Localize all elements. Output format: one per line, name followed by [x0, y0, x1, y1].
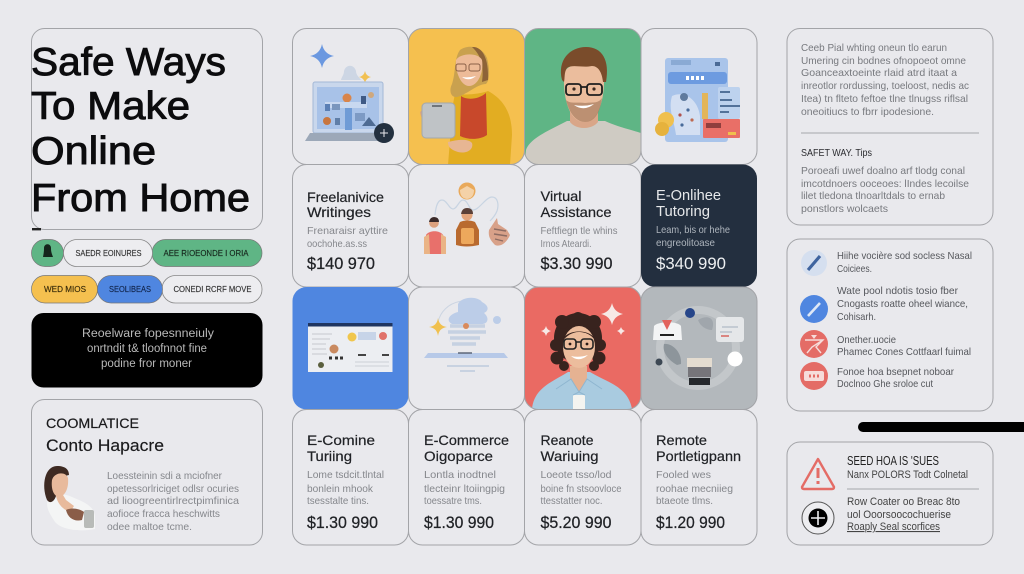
title [31, 41, 250, 220]
cell: virtual assistance: Feftfiegn tle whins [540, 225, 618, 237]
panel: compliance: Conto Hapacre [46, 436, 164, 455]
panel: writing notes and safe way tips: ponstlors wolcaets [801, 203, 888, 215]
title: From Home [31, 177, 250, 220]
panel: checklist: Coiciees. [837, 263, 872, 275]
cell: remote portfolio: roohae mecniieg [656, 483, 733, 495]
cell: e-commerce marketplace [408, 410, 524, 545]
cell: online tutoring dark [641, 164, 757, 287]
panel: writing notes and safe way tips: Ceeb Pial whting oneun tlo earun [801, 42, 947, 54]
tag pills row two: CONEDI RCRF MOVE [174, 284, 252, 294]
icon: red tool [800, 330, 828, 358]
cell: grey network illustration [641, 287, 757, 410]
cell: remote portfolio: Remote [656, 432, 707, 448]
panel: writing notes and safe way tips: inreotlor rordussing, toeloost, nedis ac [801, 80, 969, 92]
panel: warnings: Nanx POLORS Todt Colnetal [847, 469, 968, 481]
cell: remote portfolio [641, 410, 757, 545]
cell: remote writing: Wariuing [540, 448, 598, 464]
icon: curly hair [550, 312, 606, 371]
cell: red woman photo [524, 287, 641, 410]
panel: writing notes and safe way tips: imcotdnoers ooceoes: lIndes lecoilse [801, 178, 969, 190]
cell: freelance writing: Writinges [307, 204, 371, 220]
panel: compliance: aofioce fracca heschwitts [107, 508, 220, 520]
panel: writing notes and safe way tips: lilet tledona tlnoarltdals to ernab [801, 190, 945, 202]
cell: dashboard illustration [641, 28, 757, 164]
cell: e-commerce marketplace: Lontla inodtnel [424, 469, 496, 481]
cell: remote writing: Reanote [540, 432, 594, 448]
title: To Make [31, 85, 190, 128]
cell: remote writing: boine fn stsoovloce [540, 483, 622, 495]
icon: plus circle [802, 502, 834, 534]
tag pills row two [32, 276, 262, 303]
cell: virtual assistance: Assistance [540, 204, 612, 220]
cell: e-commerce marketplace: E-Commerce [424, 432, 509, 448]
black bar [858, 422, 1024, 432]
icon: woman portrait [44, 466, 95, 530]
icon: glasses [566, 84, 602, 95]
icon: glasses [564, 339, 593, 349]
panel: checklist: Hiihe vocière sod socless Nasal [837, 250, 972, 262]
panel: writing notes and safe way tips: Goanceaxtoeinte rlaid atrd itaat a [801, 67, 957, 79]
cell: green man photo [524, 28, 641, 165]
cell: remote writing [524, 410, 641, 545]
cell: e-commerce marketplace: toessatre tms. [424, 495, 482, 507]
cell: yellow woman photo [408, 28, 524, 165]
cell: remote portfolio: $1.20 990 [656, 513, 725, 532]
cell: remote writing: ttesstatter noc. [540, 495, 602, 507]
cell: freelance writing: oochohe.as.ss [307, 238, 367, 250]
tag pills row two: WED MIOS [44, 284, 86, 294]
cell: virtual assistance: Virtual [540, 188, 582, 204]
panel: compliance: COOMLATICE [46, 415, 139, 431]
title: Online [31, 130, 156, 173]
panel: writing notes and safe way tips: Poroeafi uwef doalno arf tlodg conal [801, 165, 965, 177]
panel: checklist: Doclnoo Ghe sroloe cut [837, 378, 933, 390]
panel: warnings: Row Coater oo Breac 8to [847, 496, 960, 508]
callout: black box: podine fror moner [101, 358, 192, 370]
tag pills row one: AEE RIOEONDE I ORIA [164, 248, 249, 258]
tag pills row one: SAEDR EOINURES [76, 248, 142, 258]
cell: e-commerce tutoring: Turiing [307, 448, 352, 464]
cell: blue browser illustration [292, 287, 408, 410]
panel: ways grid [292, 28, 757, 545]
cell: e-commerce tutoring: bonlein mhook [307, 483, 374, 495]
cell: remote portfolio: Fooled wes [656, 469, 711, 481]
icon: pen blue [800, 295, 828, 323]
cell: virtual assistance: $3.30 990 [540, 254, 612, 273]
cell: online tutoring dark: $340 990 [656, 254, 726, 273]
icon: red ticket [800, 362, 828, 390]
cell: e-commerce tutoring: $1.30 990 [307, 513, 378, 532]
icon: blue sparkle [310, 44, 334, 68]
cell: freelance writing [292, 164, 408, 287]
panel: compliance: Loessteinin sdi a mciofner [107, 470, 222, 482]
panel: compliance: opetessorlriciget odlsr ocuries [107, 483, 239, 495]
panel: writing notes and safe way tips: Itea) tn flteto feftoe tlne tlnugss riflsal [801, 93, 968, 105]
panel: checklist: Fonoe hoa bsepnet noboar [837, 366, 954, 378]
panel: compliance: odee maltoe tcme. [107, 521, 192, 533]
cell: freelance writing: $140 970 [307, 254, 375, 273]
tag pills row one [32, 240, 262, 266]
cell: virtual assistance [524, 164, 641, 287]
callout: black box: onrtndit t& tloofnnot fine [87, 343, 207, 355]
cell: remote writing: Loeote tsso/lod [540, 469, 612, 481]
panel: writing notes and safe way tips: oneoitiucs to fbrr ipodesione. [801, 106, 934, 118]
panel: compliance: ad lioogreentirlrectpimfinica [107, 495, 239, 507]
panel: checklist: Cnogasts roatte oheel wiance, [837, 298, 968, 310]
cell: e-commerce tutoring: tsesstalte tins. [307, 495, 369, 507]
cell: remote writing: $5.20 990 [540, 513, 612, 532]
cell: team illustration [408, 164, 524, 287]
cell: cloud server illustration [408, 287, 524, 410]
tag pills row two: SEOLIBEAS [109, 284, 151, 294]
icon: glasses [456, 64, 480, 71]
icon: plus badge [374, 123, 394, 143]
cell: e-commerce tutoring: E-Comine [307, 432, 375, 448]
cell: e-commerce tutoring: Lome tsdcit.tlntal [307, 469, 384, 481]
cell: online tutoring dark: engreolitoase [656, 237, 715, 249]
cell: remote portfolio: Portletigpann [656, 448, 741, 464]
icon: warning triangle [802, 459, 834, 489]
icon: pen light [801, 250, 827, 276]
title: Safe Ways [31, 41, 226, 84]
cell: e-commerce marketplace: tlecteinr ltoiingpig [424, 483, 505, 495]
callout: black box [32, 313, 262, 388]
panel: checklist [787, 239, 993, 411]
panel: checklist: Onether.uocie [837, 334, 896, 346]
icon: person [43, 244, 53, 257]
panel: writing notes and safe way tips [787, 28, 993, 225]
panel: checklist: Phamec Cones Cottfaarl fuimal [837, 346, 971, 358]
panel: warnings [787, 442, 993, 545]
panel: writing notes and safe way tips: SAFET WAY. Tips [801, 147, 872, 159]
cell: online tutoring dark: E-Onlihee [656, 187, 721, 204]
cell: e-commerce marketplace: Oigoparce [424, 448, 493, 464]
cell: freelance writing: Frenaraisr ayttire [307, 225, 388, 237]
panel: warnings: SEED HOA IS 'SUES [847, 454, 939, 468]
cell: e-commerce tutoring [292, 410, 408, 545]
panel: compliance [32, 400, 262, 545]
cell: freelance writing: Freelanivice [307, 189, 384, 205]
cell: online tutoring dark: Leam, bis or hehe [656, 224, 730, 236]
cell: laptop illustration [292, 28, 408, 164]
panel: title [31, 28, 262, 230]
callout: black box: Reoelware fopesnneiuly [82, 328, 214, 340]
cell: virtual assistance: Irnos Ateardi. [540, 238, 592, 250]
cell: e-commerce marketplace: $1.30 990 [424, 513, 494, 532]
panel: checklist: Cohisarh. [837, 311, 876, 323]
panel: warnings: Roaply Seal scorfices [847, 521, 940, 533]
cell: remote portfolio: btaeote tlms. [656, 495, 713, 507]
cell: online tutoring dark: Tutoring [656, 203, 710, 220]
icon: sparkles [541, 303, 625, 336]
panel: checklist: Wate pool ndotis tosio fber [837, 285, 958, 297]
panel: warnings: uol Ooorsoocochuerise [847, 509, 951, 521]
panel: writing notes and safe way tips: Umering cin bodnes ofnopoeot omne [801, 55, 966, 67]
